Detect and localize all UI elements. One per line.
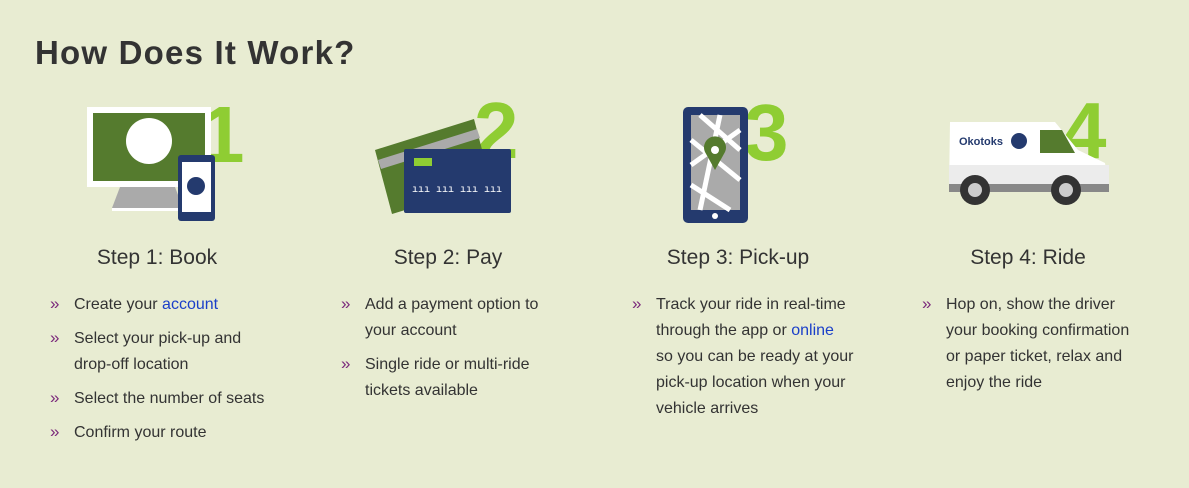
- icons: [87, 86, 1109, 223]
- title: How Does It Work?: [35, 34, 355, 71]
- list step 4: [922, 296, 1129, 391]
- list step 4: your booking confirmation: [946, 322, 1129, 339]
- list step 1: Create your account: [74, 296, 218, 313]
- list step 3: pick-up location when your: [656, 374, 845, 391]
- icon: step2 cards: [375, 86, 518, 214]
- list step 4: enjoy the ride: [946, 374, 1042, 391]
- heading step 3: Step 3: Pick-up: [667, 246, 809, 269]
- list step 1: Select the number of seats: [74, 390, 264, 407]
- icon: step3 phone map: 3: [744, 88, 788, 177]
- list step 1: Confirm your route: [74, 424, 206, 441]
- list step 2: Add a payment option to: [365, 296, 538, 313]
- list step 2: [342, 296, 538, 399]
- icon: step1 computer: [87, 90, 244, 221]
- list step 3: [632, 296, 854, 417]
- list step 2: tickets available: [365, 382, 478, 399]
- list step 4: or paper ticket, relax and: [946, 348, 1122, 365]
- list step 2: Single ride or multi-ride: [365, 356, 530, 373]
- list step 1: [50, 296, 264, 441]
- list step 1: Select your pick-up and: [74, 330, 241, 347]
- list step 4: Hop on, show the driver: [946, 296, 1115, 313]
- heading step 2: Step 2: Pay: [394, 246, 502, 269]
- icon: step4 van: Okotoks: [959, 136, 1003, 148]
- icon: step2 cards: ııı ııı ııı ııı: [412, 185, 502, 196]
- list step 2: your account: [365, 322, 457, 339]
- icon: step1 computer: 1: [200, 90, 244, 179]
- icon: step4 van: 4: [1062, 86, 1107, 175]
- list step 3: vehicle arrives: [656, 400, 758, 417]
- list step 3: through the app or online: [656, 322, 834, 339]
- list step 1: drop-off location: [74, 356, 188, 373]
- icon: step4 van: [949, 86, 1109, 205]
- list step 3: so you can be ready at your: [656, 348, 853, 365]
- heading step 4: Step 4: Ride: [970, 246, 1086, 269]
- heading step 1: Step 1: Book: [97, 246, 217, 269]
- icon: step2 cards: 2: [474, 86, 518, 175]
- icon: step3 phone map: [683, 88, 788, 223]
- list step 3: Track your ride in real-time: [656, 296, 846, 313]
